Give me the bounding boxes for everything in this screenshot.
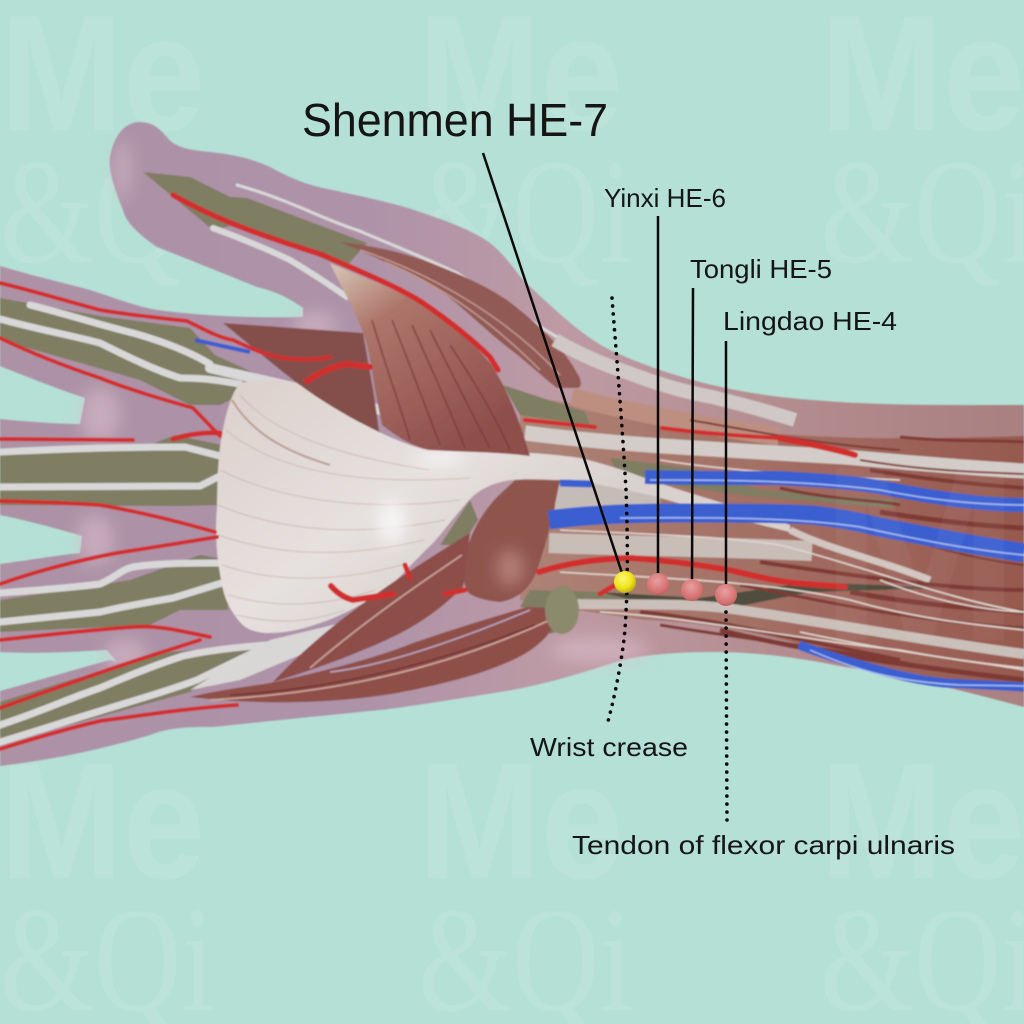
hypothenar muscle	[461, 480, 560, 602]
thumb muscle fibres	[360, 250, 560, 375]
palmar aponeurosis with palmaris longus tendon	[216, 380, 790, 633]
forearm light tendons	[525, 340, 1024, 654]
leader line: Shenmen	[483, 153, 622, 573]
leader line: Lingdao	[725, 341, 727, 585]
skin highlights at webs	[77, 140, 650, 671]
acupoint: Shenmen HE-7	[614, 571, 636, 593]
flexor fibres	[310, 555, 462, 668]
label: Shenmen HE-7: Shenmen HE-7	[302, 94, 608, 146]
dark band beside acupoints	[600, 582, 940, 606]
finger tendons	[0, 185, 557, 742]
leader line: Yinxi	[657, 216, 659, 574]
label: Wrist crease: Wrist crease	[530, 732, 688, 762]
skin silhouette	[0, 122, 1024, 766]
aponeurosis fibres	[218, 395, 470, 621]
short flexor muscle	[273, 533, 470, 682]
aponeurosis highlight	[378, 452, 466, 544]
pale tendon wedge	[190, 622, 345, 690]
long flexor muscle	[190, 607, 557, 702]
forearm pale fibres	[560, 460, 1024, 670]
watermark: &Qi	[0, 129, 215, 295]
vein highlights	[620, 480, 1024, 686]
label: Tongli HE-5: Tongli HE-5	[690, 254, 832, 284]
lumbrical muscles	[223, 323, 380, 438]
leader line: Tongli	[692, 288, 693, 580]
acupoint: Yinxi HE-6	[647, 573, 669, 595]
watermark: Me	[418, 729, 623, 913]
veins	[195, 340, 1024, 687]
faint watermark over forearm: M	[820, 414, 1020, 693]
watermark: &Qi	[418, 129, 633, 295]
acupoint: Lingdao HE-4	[715, 584, 737, 606]
forearm muscle mass	[520, 395, 1024, 692]
arteries	[0, 195, 855, 749]
label: Lingdao HE-4: Lingdao HE-4	[723, 306, 897, 336]
hypothenar highlight	[496, 550, 524, 586]
dotted line: wrist crease	[607, 298, 627, 725]
forearm muscle fibres	[640, 420, 1024, 680]
pisiform bone	[545, 586, 579, 634]
acupoint: Tongli HE-5	[681, 579, 703, 601]
thumb muscle	[340, 242, 581, 388]
thenar muscle	[330, 263, 530, 456]
label: Tendon of flexor carpi ulnaris: Tendon of flexor carpi ulnaris	[572, 830, 955, 860]
dotted line: tendon	[726, 612, 727, 820]
bones	[0, 172, 900, 742]
long flexor fibres	[210, 610, 550, 700]
label: Yinxi HE-6: Yinxi HE-6	[604, 183, 726, 213]
watermark: Me	[0, 729, 205, 913]
thenar fibres	[372, 320, 510, 450]
hand anatomy illustration	[0, 122, 1024, 766]
